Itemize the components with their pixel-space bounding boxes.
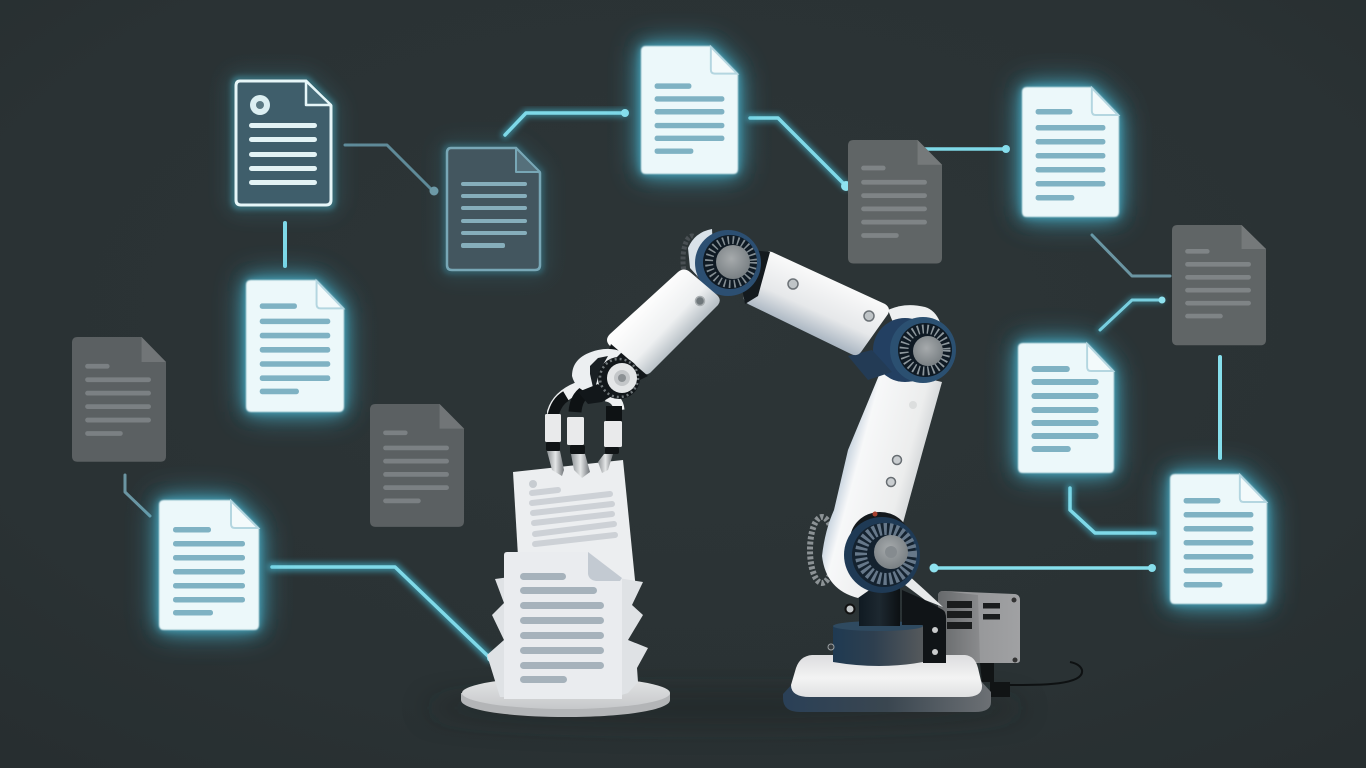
- connector: doc A to doc B: [345, 145, 438, 196]
- icon: bright document, top: [641, 46, 738, 174]
- connector: bottom right doc to robot: [930, 564, 1156, 572]
- upper arm screws: [788, 279, 874, 321]
- floor shadow: [425, 692, 1025, 724]
- upper arm: [744, 252, 889, 355]
- icon: bright document, upper right: [1022, 87, 1119, 217]
- base cylinder: [833, 588, 923, 666]
- icon: bright document, left centre: [246, 280, 344, 412]
- elbow connector: [740, 250, 770, 304]
- shoulder joint: [890, 317, 956, 383]
- round stand: [461, 677, 670, 717]
- icon: grey document, centre right: [848, 140, 942, 264]
- icon: outlined document A: [234, 79, 333, 207]
- connector: doc A down to bright doc: [281, 223, 289, 266]
- shoulder back housing: [848, 305, 940, 382]
- paper stack on round stand: [461, 460, 670, 717]
- forearm: [607, 270, 720, 374]
- connector plug: [980, 663, 1010, 697]
- icon: grey document, far right: [1172, 225, 1266, 345]
- elbow rear gear: [683, 236, 701, 284]
- connector: left grey doc to lower left doc: [125, 475, 150, 516]
- connector: grey doc to right doc: [925, 145, 1010, 153]
- robot arm: [545, 229, 991, 712]
- cable: [1008, 662, 1082, 685]
- lower arm: [822, 368, 942, 598]
- connector: lower right doc to far grey doc: [1100, 296, 1166, 330]
- connector lines: [125, 109, 1220, 662]
- base joint: [844, 512, 920, 593]
- icon: bright document, lower left: [159, 500, 259, 630]
- lower arm screws: [886, 456, 902, 486]
- sheet held by gripper: [513, 460, 636, 590]
- rear gear at base joint: [810, 517, 834, 583]
- robot base: [783, 655, 991, 712]
- gripper finger 3: [598, 396, 622, 473]
- forearm screw: [696, 296, 704, 306]
- box: [938, 591, 1020, 663]
- connector: doc B to top doc: [505, 109, 629, 135]
- icon: bright document, bottom right: [1170, 474, 1267, 604]
- gripper finger 1: [545, 388, 578, 476]
- power box with cable: [938, 591, 1082, 697]
- wrist connector: [605, 344, 648, 382]
- elbow white shell: [688, 229, 715, 290]
- connector: middle right doc to bottom right doc: [1070, 488, 1155, 533]
- icon: grey document, lower middle: [370, 404, 464, 527]
- connector: top doc to grey doc: [750, 118, 851, 191]
- crumpled sheets behind stack: [487, 577, 648, 697]
- gripper finger 2: [567, 392, 590, 478]
- icon: grey document, far left: [72, 337, 166, 462]
- connector: right doc to far grey doc: [1092, 235, 1170, 276]
- icon: bright document, middle right: [1018, 343, 1114, 473]
- rear bracket: [828, 574, 946, 663]
- connector: lower left doc to paper stack: [272, 567, 495, 662]
- elbow joint: [695, 230, 761, 296]
- front document: [504, 552, 622, 699]
- gripper palm: [572, 349, 640, 404]
- connector: far grey doc to bottom right doc: [1216, 357, 1224, 458]
- icon: dim blue document B: [446, 147, 541, 271]
